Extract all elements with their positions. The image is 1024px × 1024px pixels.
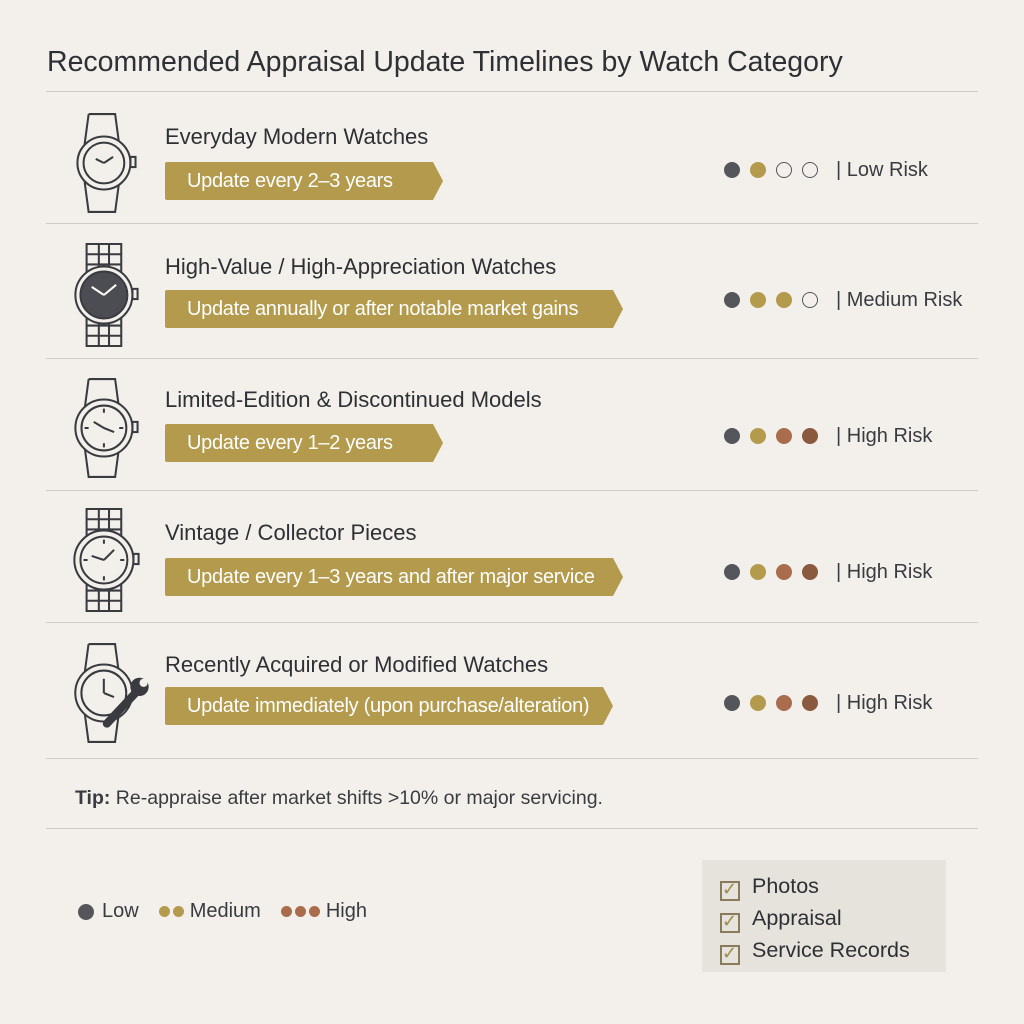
row 2 title: High-Value / High-Appreciation Watches [165, 254, 556, 279]
row 5 risk: | High Risk [836, 692, 932, 714]
checklist items: ✓ [722, 943, 737, 963]
tip: Tip: Re-appraise after market shifts >10% or major servicing. [75, 787, 603, 809]
row 4 risk [724, 560, 932, 582]
checklist items: Service Records [752, 938, 910, 962]
legend: Low Medium High [102, 900, 367, 922]
checklist items [720, 874, 910, 965]
row 3 title: Limited-Edition & Discontinued Models [165, 387, 542, 412]
checklist panel [702, 860, 946, 972]
row 1 banner: Update every 2–3 years [187, 170, 393, 192]
row 4 banner: Update every 1–3 years and after major service [187, 566, 595, 588]
row 2 banner: Update annually or after notable market gains [187, 298, 578, 320]
row 1 title: Everyday Modern Watches [165, 124, 428, 149]
row 1 banner [165, 162, 443, 200]
icon: watch with wrench [74, 643, 149, 743]
row 3 banner: Update every 1–2 years [187, 432, 393, 454]
checklist items: Photos [752, 874, 819, 898]
icon: everyday watch [76, 113, 137, 213]
row 5 title: Recently Acquired or Modified Watches [165, 652, 548, 677]
checklist items: ✓ [722, 911, 737, 931]
icon: vintage watch [73, 508, 140, 612]
row 3 banner [165, 424, 443, 462]
row 5 banner: Update immediately (upon purchase/alteration) [187, 695, 589, 717]
row 2 risk [724, 288, 962, 310]
icon: high-value watch [74, 243, 139, 347]
icon: limited edition watch [74, 378, 139, 478]
row 5 risk [724, 692, 932, 714]
row 2 risk: | Medium Risk [836, 288, 962, 310]
row 5 banner [165, 687, 613, 725]
row 4 risk: | High Risk [836, 560, 932, 582]
row 1 risk: | Low Risk [836, 158, 928, 180]
checklist items: ✓ [722, 879, 737, 899]
title: Recommended Appraisal Update Timelines by Watch Category [47, 46, 843, 78]
row 2 banner [165, 290, 623, 328]
row 1 risk [724, 158, 928, 180]
row 4 title: Vintage / Collector Pieces [165, 520, 417, 545]
row 3 risk [724, 424, 932, 446]
row 3 risk: | High Risk [836, 424, 932, 446]
checklist items: Appraisal [752, 906, 842, 930]
row 4 banner [165, 558, 623, 596]
